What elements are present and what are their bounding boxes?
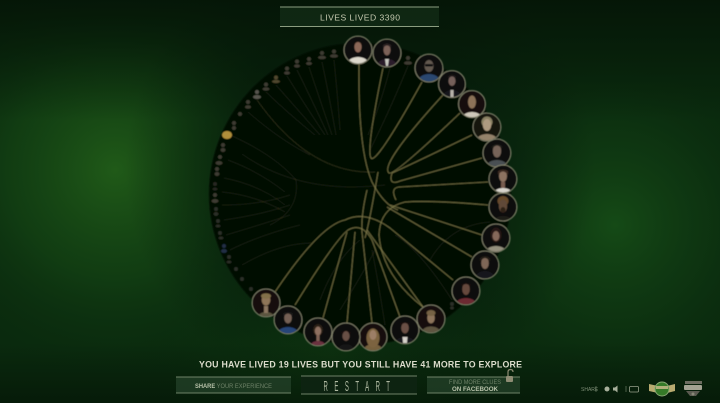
- chord wheel: [209, 36, 517, 356]
- avatar 2: bow tie: [373, 39, 401, 73]
- avatar 1: white collar: [344, 36, 372, 69]
- header: lives lived counter: [280, 7, 439, 27]
- icon: open padlock: [506, 370, 513, 382]
- bright chords from lived lives: [275, 64, 488, 323]
- avatar 4: dark suit: [438, 70, 466, 102]
- small locked avatars: [212, 50, 454, 310]
- button: share your experience: [176, 377, 291, 393]
- status message: YOU HAVE LIVED 19 LIVES BUT YOU STILL HAVE 41 MORE TO EXPLORE: [199, 360, 522, 370]
- icon: settings gear: [604, 386, 610, 392]
- footer controls: SHARE: [581, 387, 599, 393]
- logo: perrier badge: [649, 382, 675, 396]
- avatar 13: short fair hair: [417, 305, 445, 338]
- footer controls: [581, 386, 638, 393]
- avatar 8: white top: [489, 165, 517, 198]
- avatar 6: blonde woman: [473, 113, 501, 146]
- button: restart: [301, 376, 417, 395]
- button: find more clues on facebook: [427, 377, 520, 393]
- avatar 17: pink collar: [304, 318, 332, 349]
- dark disc: [209, 43, 511, 345]
- button: find more clues on facebook: ON FACEBOOK: [452, 386, 499, 393]
- avatar 9: bearded face: [489, 193, 517, 224]
- avatar 15: long blonde hair: [359, 323, 387, 356]
- icon: screen: [630, 386, 638, 392]
- chord: top lives: [359, 64, 398, 210]
- avatar 19: fair woman: [252, 289, 280, 322]
- avatar 16: dark hair: [332, 323, 360, 354]
- button: restart: RESTART: [324, 379, 396, 395]
- avatar 14: tuxedo: [391, 316, 419, 349]
- faint chords from unexplored lives: [222, 60, 490, 325]
- avatar 12: red top: [452, 277, 480, 310]
- button: share your experience: SHARE YOUR EXPERIENCE: [195, 383, 272, 390]
- avatar 3: sunglasses: [415, 54, 443, 86]
- header: lives lived counter: LIVES LIVED 3390: [320, 12, 400, 22]
- avatar 11: dark jacket: [471, 251, 499, 283]
- button: find more clues on facebook: FIND MORE CLUES: [449, 380, 501, 386]
- icon: speaker: [613, 386, 618, 392]
- logo: perrier secret label: [684, 381, 702, 396]
- avatar 10: woman in pale top: [482, 224, 510, 258]
- avatar 18: blue shirt: [274, 306, 302, 339]
- avatar 5: bald man: [458, 90, 486, 122]
- avatar 7: grey shirt: [483, 139, 511, 172]
